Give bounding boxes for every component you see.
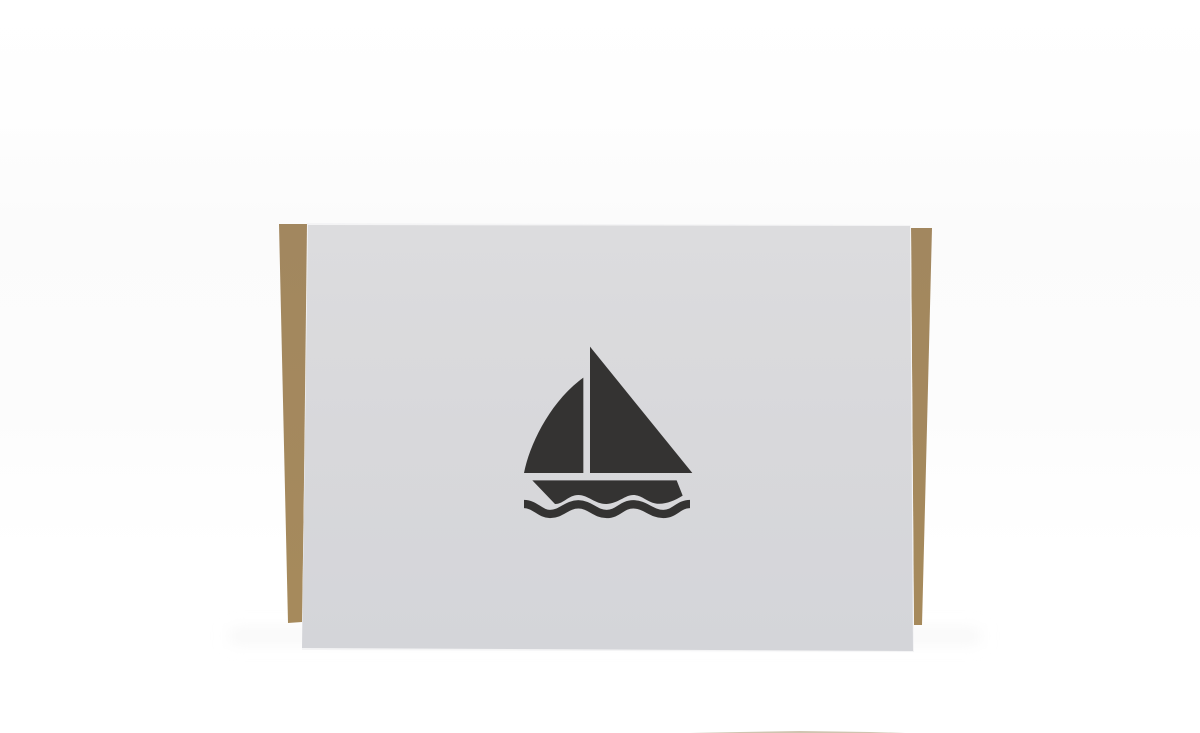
envelope: left flap (279, 224, 308, 623)
icon: sailboat (524, 347, 692, 514)
hull (532, 480, 683, 504)
main sail (590, 347, 692, 473)
envelope: right flap (911, 228, 932, 625)
floor shadow (230, 630, 980, 642)
waves (524, 504, 690, 514)
card (302, 223, 914, 652)
surface edge at bottom (690, 731, 905, 733)
fore sail (524, 378, 583, 473)
